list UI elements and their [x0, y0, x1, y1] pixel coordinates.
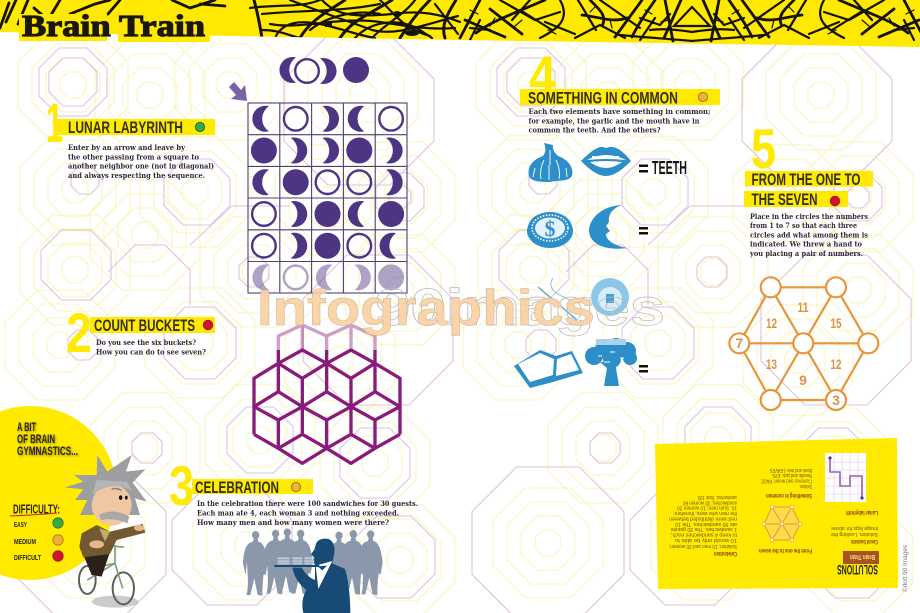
panel: 2 count buckets: [66, 301, 215, 364]
number hexagon puzzle: 12: [830, 356, 842, 372]
heading bar: [90, 317, 215, 333]
header band with branches: [0, 0, 920, 47]
celebration solution: 1 sandwiches. The 30 guests: [670, 526, 737, 532]
panel: 5 from the one to the seven: [729, 117, 878, 410]
instructions: Enter by an arrow and leave by: [68, 143, 185, 152]
number hexagon puzzle: [729, 277, 878, 410]
instructions: circles add what among them is: [750, 230, 869, 240]
legend: easy: [14, 518, 63, 529]
instructions: [68, 143, 214, 180]
number hexagon puzzle: 11: [798, 299, 809, 315]
heading bar: [192, 479, 313, 494]
number hexagon puzzle: 9: [799, 372, 807, 388]
instructions: Place in the circles the numbers: [750, 212, 869, 221]
number 1: 1: [46, 91, 63, 154]
number 5: 5: [751, 117, 776, 180]
heading: CELEBRATION: [195, 478, 279, 497]
something in common solution: [760, 467, 812, 498]
small solved hexagon: [762, 505, 802, 542]
heading: LUNAR LABYRINTH: [68, 118, 183, 137]
number hexagon puzzle: 3: [832, 392, 840, 408]
problem text: How many men and how many women were there?: [197, 518, 389, 527]
something in common solution: Needle and jack: EYE: [771, 472, 812, 478]
celebration solution: 10. Sum men: 10 women 20: [677, 504, 737, 510]
illustration: cartoon scientist on bicycle: [65, 455, 147, 608]
count buckets solution: [831, 525, 878, 544]
number 3: 3: [169, 454, 194, 517]
question text: How you can do to see seven?: [96, 348, 206, 356]
instructions: from 1 to 7 so that each three: [750, 221, 857, 230]
panel: 3 celebration: [169, 454, 418, 527]
count buckets solution: Solution. Looking the: [831, 531, 878, 537]
moon sequence: [279, 57, 369, 84]
celebration solution: rest were distributed between: [669, 515, 737, 521]
brain train tag: [843, 551, 879, 564]
icon: thread spool: [591, 278, 629, 316]
heading bar: [520, 89, 720, 105]
title: Brain Train: [22, 8, 205, 43]
difficulty dot: medium: [291, 482, 301, 492]
brain train tag: Brain Train: [850, 553, 875, 562]
problem text: [197, 499, 418, 527]
icon: open book: [514, 350, 583, 388]
instructions: and always respecting the sequence.: [68, 171, 205, 180]
equals sign: [639, 365, 648, 372]
instructions: another neighbor one (not in diagonal): [68, 162, 214, 171]
answer: teeth: [639, 158, 687, 178]
moon labyrinth grid: [248, 103, 407, 293]
hexagon buckets figure: [254, 325, 400, 463]
illustration: guests and waiter: [243, 528, 383, 613]
number hexagon puzzle: 12: [766, 315, 777, 331]
celebration solution: sandwiches, 30 women 60: [683, 499, 737, 505]
yellow circle: [0, 406, 117, 580]
celebration solution: Celebration: [714, 550, 737, 556]
watermark: Infographics: [257, 280, 595, 336]
problem text: In the celebration there were 100 sandwiches for 30 guests.: [197, 499, 418, 508]
waiter silhouette: [274, 539, 350, 613]
explanation text: common the teeth. And the others?: [528, 126, 661, 134]
heading bars: [744, 171, 873, 207]
heading: [752, 170, 860, 209]
instructions: indicated. We threw a hand to: [750, 240, 862, 248]
heading: COUNT BUCKETS: [94, 316, 195, 335]
explanation text: [528, 107, 711, 134]
something in common solution: Currency and moon: FACE: [760, 477, 812, 483]
equals sign: [639, 227, 648, 234]
something in common solution: Solution.: [799, 483, 812, 489]
watermark: 90images: [375, 279, 665, 337]
number 4: 4: [529, 44, 556, 107]
celebration solution: ate 90 sandwiches. The 10: [675, 521, 737, 527]
instructions: the other passing from a square to: [68, 152, 199, 161]
celebration solution: sandwiches. Total: 100.: [697, 494, 737, 500]
legend: medium: [14, 535, 63, 546]
icon: needle and thread: [538, 278, 577, 320]
instructions: [749, 212, 869, 258]
caption: A BIT: [17, 420, 36, 434]
something in common solution: Book and tree: LEAVES: [769, 467, 812, 473]
celebration solution: the men who were, therefore,: [673, 510, 737, 516]
difficulty dot: easy: [195, 122, 205, 132]
guests silhouettes: [243, 528, 383, 596]
panel: difficulty legend: [0, 406, 117, 580]
legend: difficult: [14, 551, 63, 562]
icon: coin: [527, 212, 573, 248]
icon: coin: $: [544, 216, 556, 241]
celebration solution: Solution: 10 men and 20 women.: [669, 543, 737, 549]
credit line: ©dott 90 Images: [902, 545, 909, 592]
heading: THE SEVEN: [752, 190, 818, 209]
count buckets solution: Count buckets: [851, 538, 878, 544]
difficulty dot: difficult: [203, 320, 213, 330]
panel: 4 something in common: [514, 44, 720, 388]
solved grid: [825, 453, 866, 502]
caption: OF BRAIN: [17, 432, 55, 446]
caption: GYMNASTICS...: [17, 444, 78, 458]
arrow into labyrinth: [229, 82, 247, 101]
solutions heading: SOLUTIONS: [837, 562, 878, 578]
problem text: Each man ate 4, each woman 3 and nothing exceeded.: [197, 508, 399, 518]
caption: [17, 420, 78, 458]
from one to seven solution: From the one to the seven: [759, 547, 812, 553]
answer: teeth: TEETH: [652, 158, 687, 178]
heading bar: [54, 119, 215, 135]
heading: SOMETHING IN COMMON: [528, 88, 678, 108]
question text: [96, 338, 206, 356]
panel: 1 lunar labyrinth: [46, 91, 215, 180]
number hexagon puzzle: 15: [830, 315, 842, 331]
icon: tree: [585, 338, 637, 386]
panel: upside-down solutions: [655, 438, 898, 589]
number 2: 2: [66, 301, 92, 364]
lunar labyrinth solution: Lunar labyrinth: [846, 509, 878, 515]
legend: easy: EASY: [14, 520, 27, 529]
question text: Do you see the six buckets?: [96, 338, 196, 347]
explanation text: for example, the garlic and the mouth have in: [528, 116, 700, 125]
number hexagon puzzle: 13: [766, 356, 777, 372]
icon: garlic: [529, 143, 572, 182]
heading: FROM THE ONE TO: [752, 170, 860, 189]
legend: difficult: DIFFICULT: [14, 553, 41, 562]
legend: medium: MEDIUM: [14, 537, 36, 546]
celebration solution: [669, 494, 737, 556]
number hexagon puzzle: 7: [735, 335, 743, 351]
difficulty heading: DIFFICULTY:: [13, 502, 60, 516]
celebration solution: 10 would only be able to: [675, 537, 737, 543]
count buckets solution: image legs for above: [831, 525, 878, 531]
something in common solution: Something in common: [766, 492, 812, 498]
instructions: you placing a pair of numbers.: [749, 249, 863, 258]
icon: mouth: [581, 147, 631, 176]
celebration solution: to keep 4 sandwiches each;: [671, 531, 737, 537]
difficulty dot: difficult: [830, 196, 840, 206]
explanation text: Each two elements have something in common;: [528, 107, 711, 116]
difficulty dot: medium: [698, 92, 708, 102]
icon: crescent moon face: [589, 205, 628, 249]
